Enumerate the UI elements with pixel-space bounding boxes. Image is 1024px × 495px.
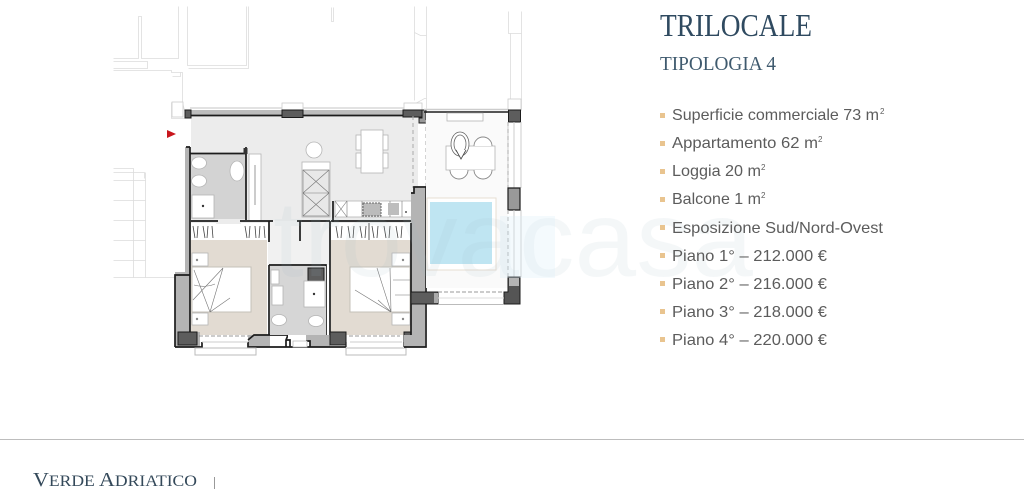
title: TRILOCALE (660, 7, 812, 43)
feature list: Piano 2° – 216.000 € (672, 276, 827, 293)
feature list: Appartamento 62 m (672, 135, 818, 152)
floor plan (172, 99, 521, 355)
feature list: Loggia 20 m (672, 163, 761, 180)
entry and corridor floor (190, 116, 191, 152)
feature list: Esposizione Sud/Nord-Ovest (672, 220, 884, 237)
feature list: Piano 4° – 220.000 € (672, 332, 827, 349)
icon: entrance arrow (167, 130, 176, 138)
upper bathroom (185, 147, 248, 272)
feature list: 2 (761, 191, 766, 200)
top wall (172, 102, 426, 123)
subtitle: TIPOLOGIA 4 (660, 53, 776, 75)
right load-bearing wall (404, 187, 438, 347)
icon: outdoor table and chairs (446, 132, 495, 179)
loggia lower column (504, 277, 520, 304)
lower bathroom (270, 266, 346, 347)
loggia column (508, 188, 520, 210)
living room storage and furniture (249, 116, 426, 221)
left bedroom (191, 223, 268, 335)
living room floor (190, 116, 418, 224)
feature list: 2 (880, 107, 885, 116)
outer left and bottom walls (175, 272, 288, 355)
right bedroom (330, 223, 423, 355)
central partition walls (191, 201, 412, 335)
feature list: Piano 3° – 218.000 € (672, 304, 827, 321)
neighbouring building outlines (114, 6, 522, 278)
feature list: 2 (818, 135, 823, 144)
feature list: Superficie commerciale 73 m (672, 107, 879, 124)
feature list (660, 107, 885, 349)
footer logo: VERDE ADRIATICO (33, 469, 197, 491)
footer rule (0, 439, 1024, 440)
feature list: Balcone 1 m (672, 191, 761, 208)
feature list: 2 (761, 163, 766, 172)
footer separator (214, 477, 215, 489)
plunge pool (427, 198, 496, 270)
loggia (424, 99, 521, 304)
watermark tint (500, 216, 555, 278)
feature list: Piano 1° – 212.000 € (672, 248, 827, 265)
watermark: trovacasa (273, 178, 754, 299)
